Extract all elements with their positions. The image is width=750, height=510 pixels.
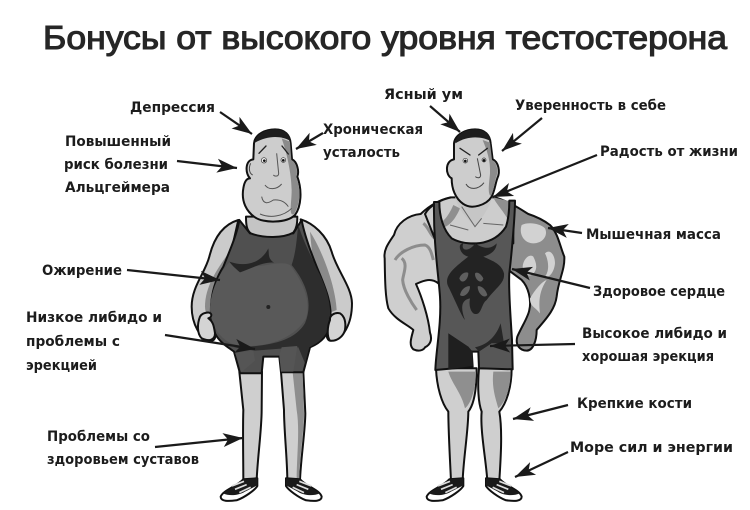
arrow: strong bones bbox=[513, 405, 568, 419]
label: energy: Море сил и энергии bbox=[570, 440, 733, 456]
trap and delt shading bbox=[433, 197, 512, 229]
arrow: clear mind bbox=[430, 106, 460, 132]
singlet and shorts bbox=[434, 201, 515, 370]
arrow: obesity bbox=[127, 270, 220, 280]
head bbox=[243, 129, 300, 222]
label: self-confidence: Уверенность в себе bbox=[515, 98, 666, 114]
arrow: Alzheimer risk bbox=[177, 161, 237, 168]
shorts light panel bbox=[235, 351, 255, 372]
figure: high testosterone man bbox=[384, 129, 564, 501]
right arm shadow bbox=[310, 232, 337, 313]
label: low libido line 3: эрекцией bbox=[26, 358, 97, 374]
label: chronic fatigue line 2: усталость bbox=[323, 145, 400, 161]
abdominal muscles bbox=[459, 272, 487, 296]
label: healthy heart: Здоровое сердце bbox=[593, 284, 725, 300]
arrow: healthy heart bbox=[512, 269, 590, 288]
label: Alzheimer risk: Повышенный bbox=[65, 134, 171, 150]
label: chronic fatigue: Хроническая bbox=[323, 122, 423, 138]
head bbox=[447, 129, 499, 207]
label: clear mind: Ясный ум bbox=[384, 87, 463, 103]
arrow: depression bbox=[220, 112, 252, 134]
right shoe bbox=[486, 478, 522, 501]
label: low libido: Низкое либидо и bbox=[26, 310, 162, 326]
left arm shadow bbox=[205, 253, 228, 318]
right leg bbox=[478, 368, 512, 481]
left leg bbox=[239, 372, 262, 481]
dark side of singlet bbox=[233, 225, 330, 363]
arrow: high libido bbox=[490, 344, 575, 346]
label: joy of life: Радость от жизни bbox=[600, 144, 738, 160]
title: Бонусы от высокого уровня тестостерона bbox=[43, 19, 728, 56]
label: obesity: Ожирение bbox=[42, 263, 122, 279]
label: muscle mass: Мышечная масса bbox=[586, 227, 721, 243]
left arm bbox=[384, 197, 451, 351]
head shadow bbox=[483, 140, 497, 196]
right leg bbox=[281, 372, 305, 481]
shorts dark panels bbox=[448, 333, 473, 369]
left leg bbox=[436, 368, 477, 481]
left hand bbox=[198, 313, 215, 340]
right hand bbox=[328, 313, 345, 341]
right leg shadow bbox=[493, 372, 511, 408]
labels: right column bbox=[384, 87, 738, 456]
right leg shadow bbox=[293, 372, 304, 479]
arrow: low libido bbox=[165, 335, 255, 349]
chest and shoulders bbox=[425, 197, 513, 243]
left arm muscle shading bbox=[395, 223, 435, 310]
neck and chins bbox=[246, 217, 297, 237]
neck bbox=[455, 195, 493, 227]
left shoe bbox=[221, 478, 257, 501]
arrows bbox=[127, 106, 597, 477]
right shoe bbox=[286, 478, 322, 501]
left leg shadow bbox=[448, 372, 476, 408]
label: high libido: Высокое либидо и bbox=[582, 326, 727, 342]
label: low libido line 2: проблемы с bbox=[26, 334, 120, 350]
labels: left column bbox=[26, 100, 423, 468]
label: high libido line 2: хорошая эрекция bbox=[582, 349, 714, 365]
arrow: self-confidence bbox=[502, 118, 542, 151]
label: joint problems: Проблемы со bbox=[47, 429, 150, 445]
figure: low testosterone man bbox=[192, 129, 352, 501]
label: Alzheimer risk line 2: риск болезни bbox=[64, 157, 168, 173]
right arm highlights bbox=[521, 223, 555, 313]
arrow: joy of life bbox=[493, 155, 597, 197]
singlet and shorts bbox=[211, 220, 331, 373]
face bbox=[450, 148, 503, 230]
face bbox=[249, 146, 292, 216]
head shadow bbox=[282, 138, 299, 214]
label: strong bones: Крепкие кости bbox=[577, 396, 692, 412]
arrow: muscle mass bbox=[548, 228, 582, 233]
arrow: energy bbox=[515, 452, 568, 477]
label: Alzheimer risk line 3: Альцгеймера bbox=[65, 180, 170, 196]
belly navel and chest lines bbox=[229, 248, 274, 272]
left shoe bbox=[427, 478, 463, 501]
belly bbox=[210, 262, 308, 346]
right arm bbox=[301, 219, 352, 341]
label: depression: Депрессия bbox=[130, 100, 215, 116]
abdominal dark pattern bbox=[447, 243, 504, 320]
arrow: chronic fatigue bbox=[296, 133, 323, 149]
hair bbox=[255, 129, 290, 143]
arrow: joint problems bbox=[155, 438, 243, 447]
label: joint problems line 2: здоровьем суставов bbox=[47, 452, 199, 468]
right arm bbox=[495, 197, 564, 351]
hair bbox=[455, 129, 490, 143]
left arm bbox=[192, 220, 238, 341]
